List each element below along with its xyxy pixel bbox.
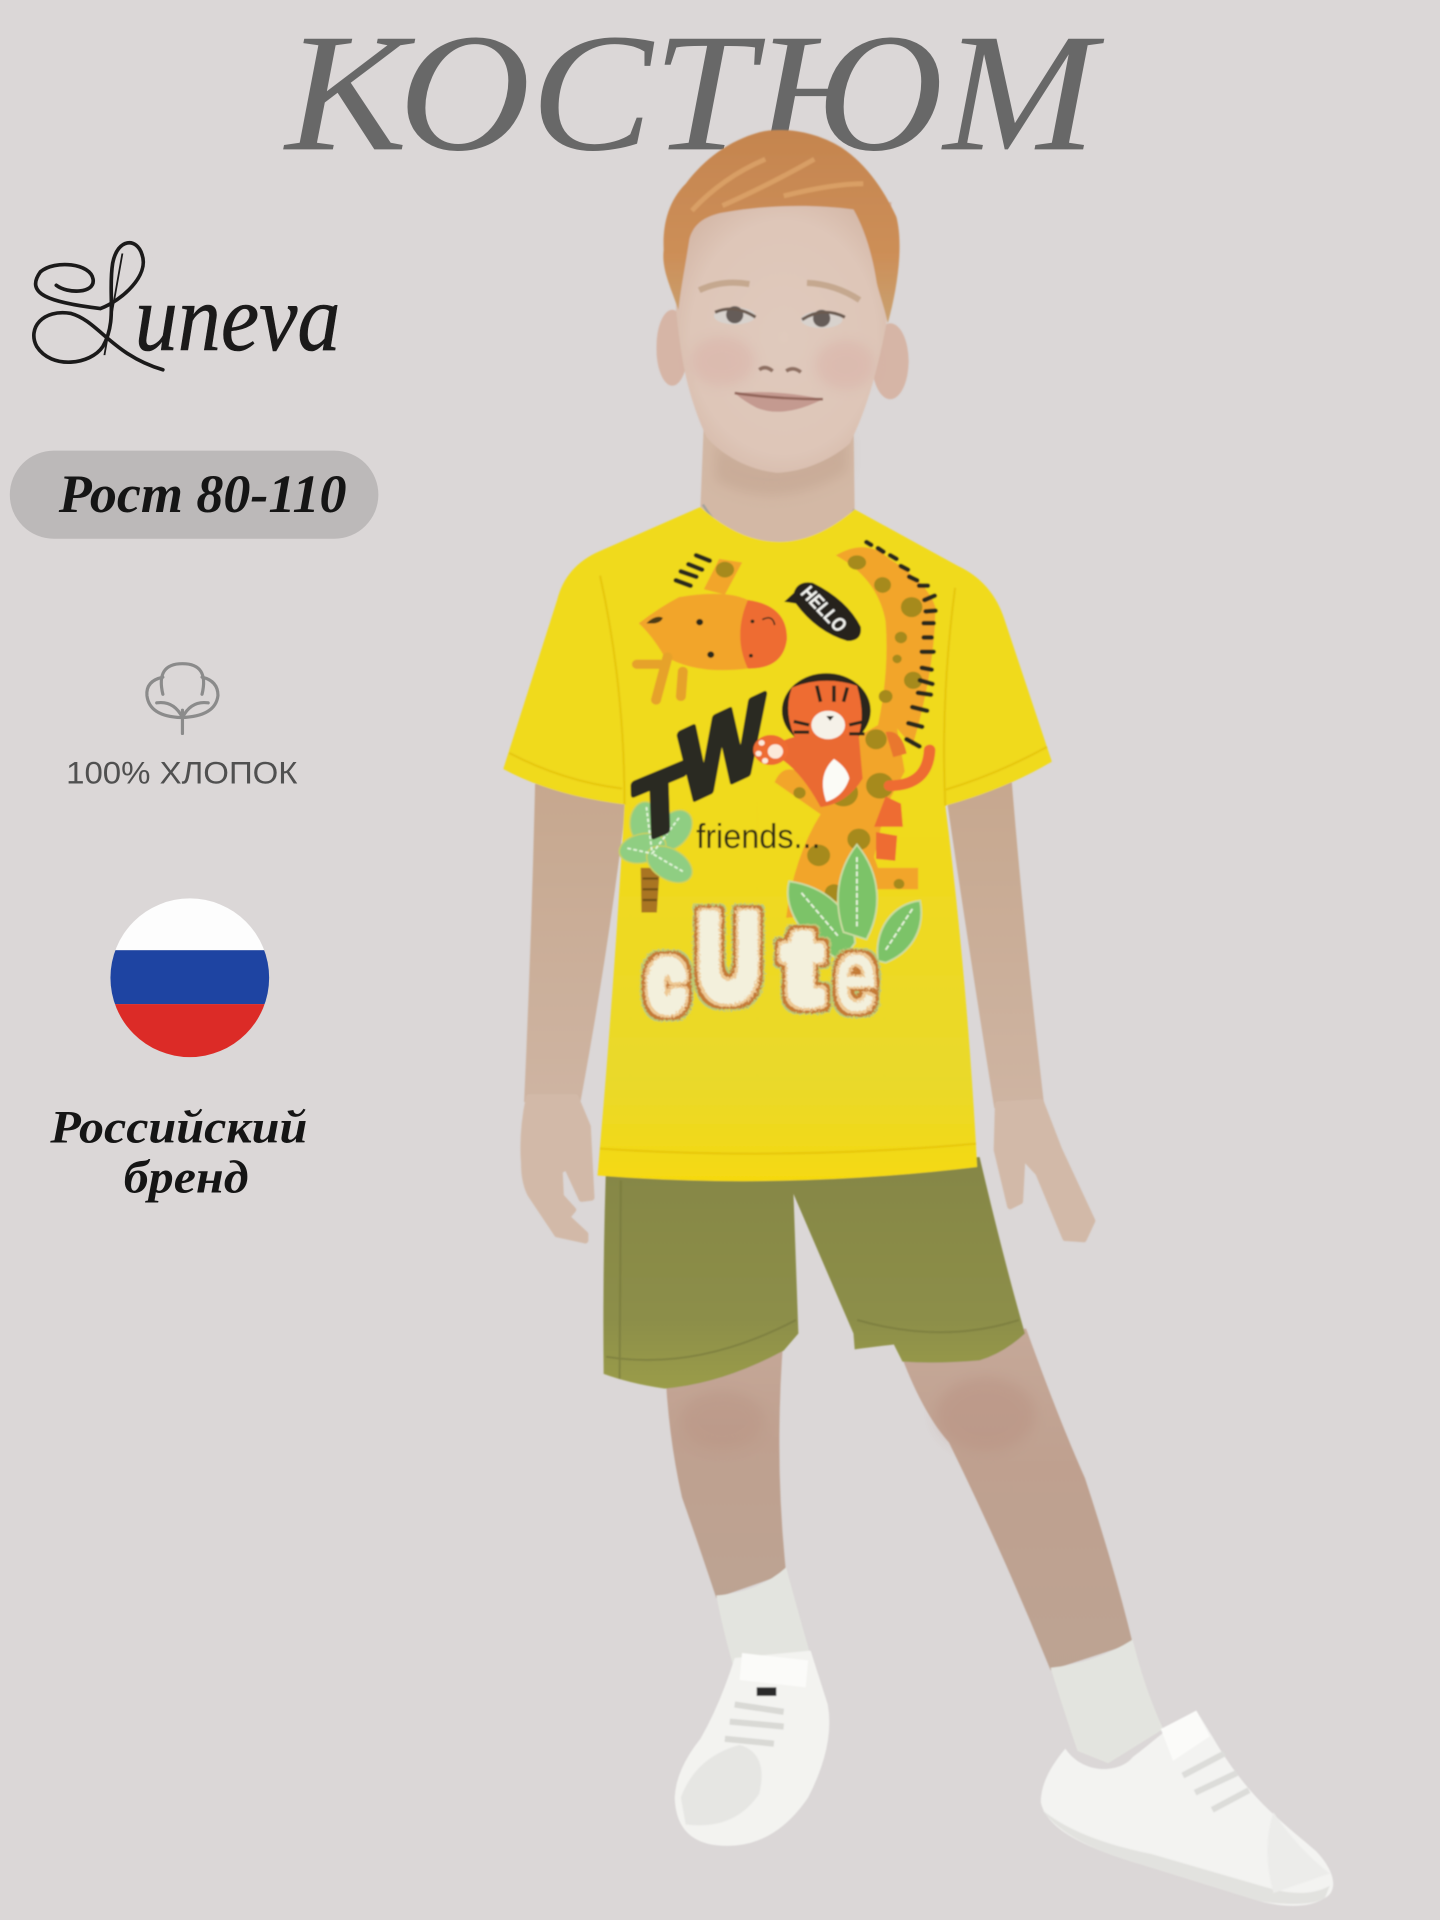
- height badge: Рост 80-110: [58, 464, 347, 524]
- knee shading: [681, 1391, 764, 1450]
- print: two lettering: W: [680, 672, 764, 828]
- eyes and brows: [699, 283, 860, 328]
- print: cute lettering: c: [648, 928, 685, 1028]
- t-shirt print: [616, 542, 935, 1030]
- print: hello speech bubble: HELLO: [796, 583, 851, 637]
- head: [656, 130, 909, 473]
- print: friends text: friends...: [696, 817, 821, 856]
- face: [676, 202, 891, 473]
- left shoe: [675, 1651, 829, 1846]
- t-shirt: [503, 507, 1052, 1181]
- russian brand label: бренд: [124, 1153, 249, 1204]
- brand logo: Luneva: uneva: [135, 265, 340, 371]
- right shoe: [1041, 1711, 1333, 1906]
- print: cute lettering: U: [698, 891, 759, 1024]
- nose and mouth: [759, 368, 801, 372]
- cotton badge: [66, 664, 298, 791]
- neck: [700, 416, 855, 563]
- print: tiger paw: [753, 735, 788, 765]
- hair: [663, 130, 900, 323]
- ears: [656, 310, 909, 399]
- brand logo: Luneva: L: [79, 205, 181, 401]
- socks: [716, 1567, 1163, 1763]
- print: two lettering: T: [632, 745, 687, 862]
- print: giraffe spots: [793, 555, 922, 901]
- cotton label: 100% ХЛОПОК: [66, 756, 298, 791]
- legs: [665, 1329, 1133, 1670]
- print: cute lettering: [648, 891, 876, 1030]
- boy in yellow t-shirt and olive shorts: [503, 130, 1333, 1906]
- russian brand label: [49, 1102, 307, 1204]
- print: tiger: [778, 673, 930, 861]
- print: cute lettering: e: [836, 920, 876, 1030]
- print: giraffe body and neck: [775, 547, 935, 918]
- print: cute lettering: t: [784, 911, 821, 1024]
- title: КОСТЮМ: [283, 0, 1105, 186]
- print: palm tree: [616, 802, 700, 913]
- shorts: [603, 1157, 1025, 1389]
- arms: [524, 778, 1044, 1108]
- brand logo: Luneva: [34, 205, 340, 401]
- print: giraffe head: [637, 559, 787, 700]
- print: two lettering: [632, 672, 764, 862]
- icon: russian flag: [110, 898, 270, 1058]
- russian brand label: Российский: [49, 1102, 307, 1153]
- icon: cotton boll: [147, 664, 218, 733]
- print: large leaves: [788, 845, 921, 963]
- print: giraffe mane stripes: [676, 542, 935, 746]
- height badge: [10, 451, 378, 539]
- hands: [523, 1097, 1092, 1240]
